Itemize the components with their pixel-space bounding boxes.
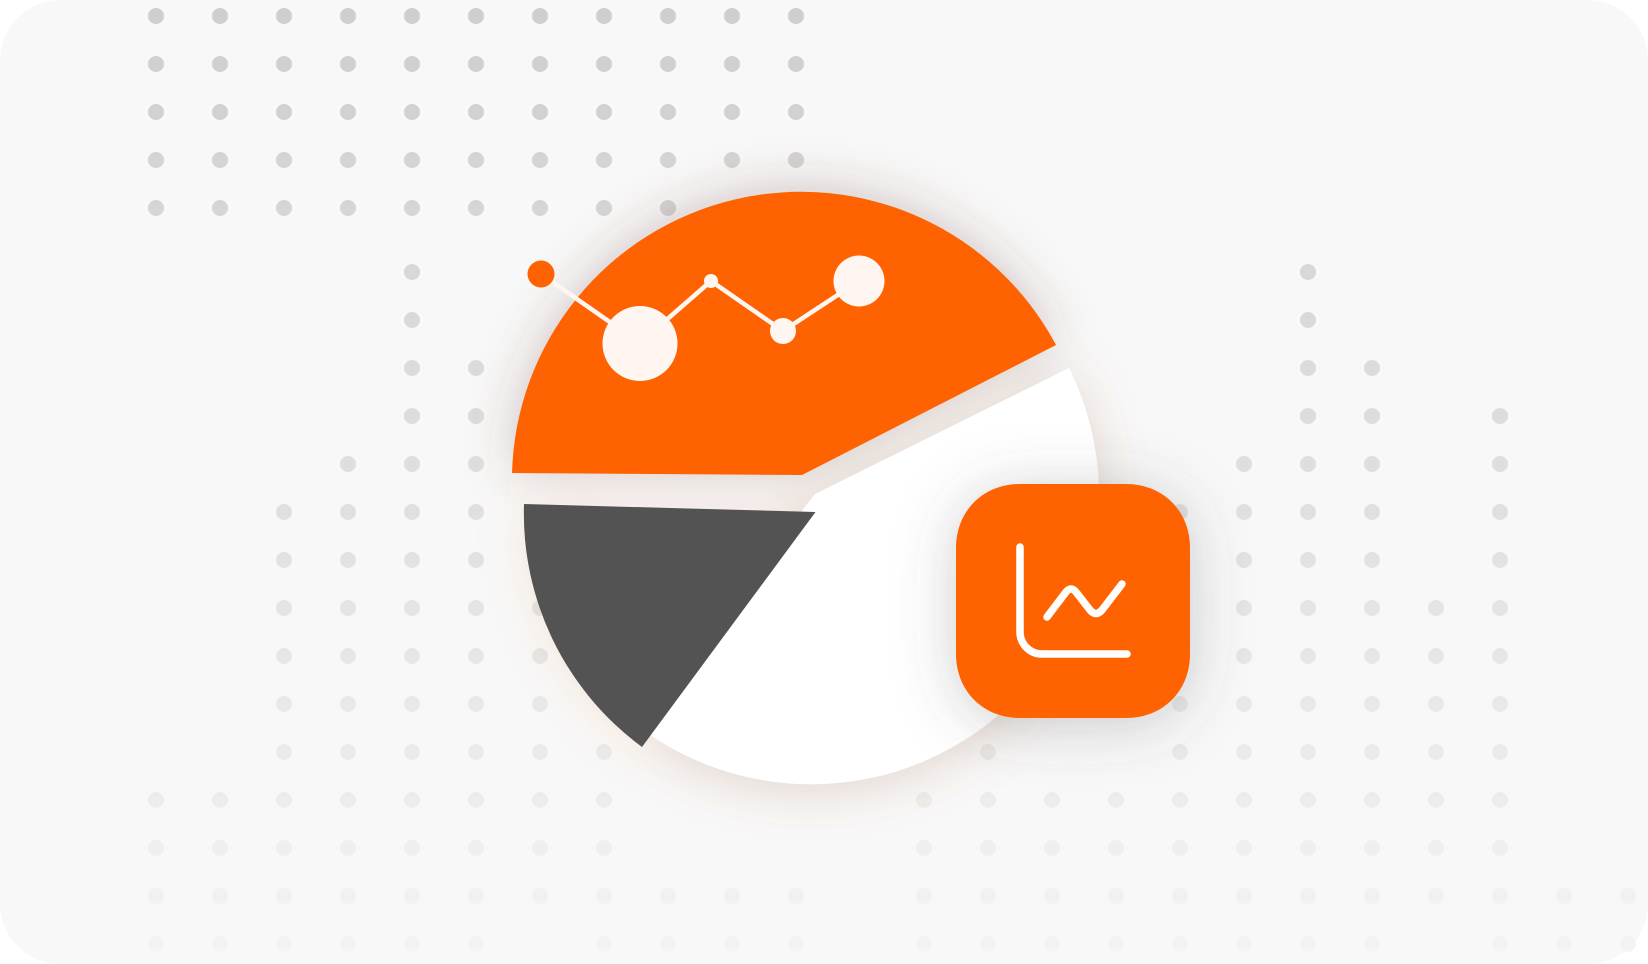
pie slice: dark grey [524, 504, 816, 747]
data point: large [602, 306, 678, 381]
icon trend line [1047, 584, 1122, 617]
line chart over orange slice [528, 256, 884, 381]
data point: small [770, 318, 796, 344]
icon axes [1020, 547, 1127, 654]
tile background [956, 484, 1190, 718]
data point: medium [834, 256, 884, 306]
chart line [541, 274, 859, 343]
data point: tiny [704, 274, 718, 288]
pie slice: orange [512, 192, 1056, 475]
pie chart [512, 188, 1099, 790]
icon tile: line chart [956, 484, 1190, 718]
data point: orange [528, 260, 554, 288]
soft shadow beneath pie [512, 188, 1099, 790]
pie slice: white [650, 368, 1099, 784]
